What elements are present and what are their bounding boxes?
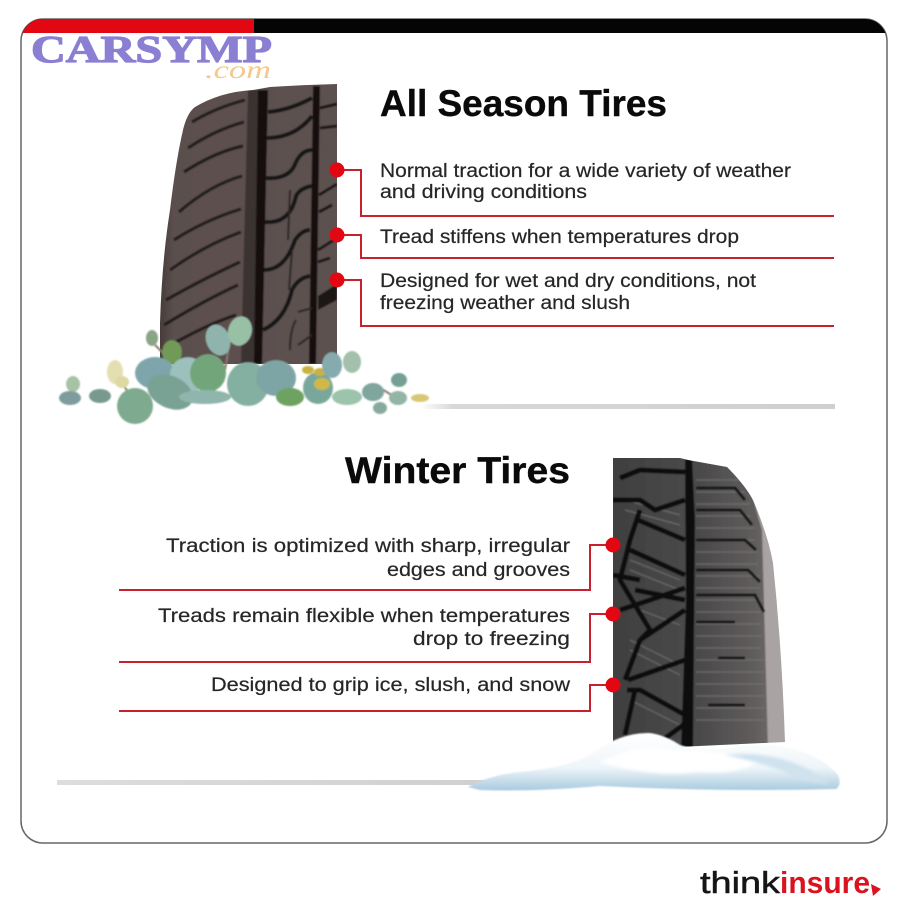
heading: all season tires: All Season Tires — [380, 83, 667, 124]
centre treads — [263, 98, 312, 330]
winter: point 3 — [119, 675, 620, 711]
heading: winter tires: Winter Tires — [345, 450, 570, 491]
winter: point 2 — [119, 606, 620, 662]
shoulder treads — [162, 100, 245, 350]
outer wall — [752, 499, 785, 743]
main grooves — [241, 90, 268, 364]
all season: point 2: Tread stiffens when temperatures drop — [380, 227, 739, 248]
all season tire illustration — [155, 80, 340, 370]
all season: point 3: freezing weather and slush — [380, 293, 630, 314]
ground line: all season — [420, 404, 835, 409]
tread blocks — [625, 480, 764, 725]
winter: point 1: edges and grooves — [387, 560, 570, 581]
winter: point 2: drop to freezing — [413, 629, 570, 650]
ground line: winter — [57, 780, 487, 785]
all season: point 1: and driving conditions — [380, 182, 587, 203]
main groove — [681, 458, 695, 750]
winter: point 1: Traction is optimized with sharp, irregular — [166, 536, 571, 557]
winter tire illustration — [613, 458, 785, 747]
snow pile — [468, 733, 840, 790]
watermark logo — [31, 29, 272, 84]
thinkinsure logo — [700, 865, 881, 900]
all season: point 3 — [330, 271, 834, 326]
watermark logo: .com — [205, 57, 271, 84]
winter: point 1 — [119, 536, 620, 590]
all season: point 2 — [330, 227, 834, 258]
thinkinsure logo: think — [700, 865, 781, 900]
winter: point 3: Designed to grip ice, slush, and snow — [211, 675, 570, 696]
thinkinsure logo: insure — [780, 865, 870, 900]
all season: point 1 — [330, 161, 834, 216]
diagonal grooves — [613, 470, 690, 742]
eucalyptus leaves — [59, 313, 429, 424]
top bar — [21, 19, 887, 33]
winter: point 2: Treads remain flexible when temperatures — [158, 606, 570, 627]
all season: point 3: Designed for wet and dry conditions, not — [380, 271, 757, 292]
all season: point 1: Normal traction for a wide variety of weather — [380, 161, 792, 182]
watermark logo: CARSYMP — [31, 29, 272, 71]
